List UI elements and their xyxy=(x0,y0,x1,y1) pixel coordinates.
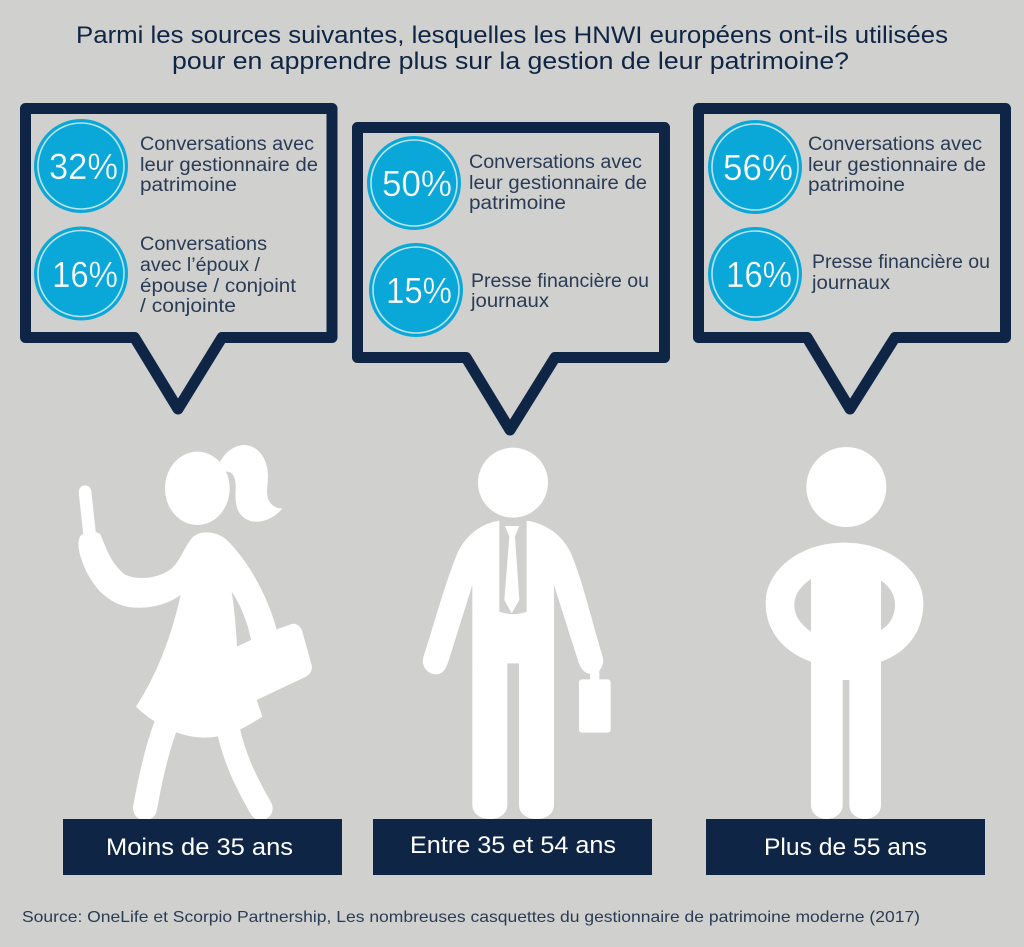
stat: 16%: 16% xyxy=(726,254,792,295)
stat: 32% xyxy=(34,119,128,213)
stat: 16%: 16% xyxy=(52,254,118,295)
text: conversations époux: Conversations xyxy=(140,234,267,255)
label: moins de 35 ans: Moins de 35 ans xyxy=(106,834,293,861)
stat: 15% xyxy=(369,243,463,337)
text: presse financière xyxy=(811,252,990,294)
stat: 50% xyxy=(367,136,461,230)
text: conversations gestionnaire xyxy=(140,134,318,196)
text: conversations gestionnaire: leur gestionnaire de xyxy=(808,155,986,176)
stat: 56%: 56% xyxy=(723,147,793,188)
text: conversations gestionnaire: leur gestionnaire de xyxy=(469,173,647,194)
stat: 50%: 50% xyxy=(382,163,452,204)
stat: 16% xyxy=(708,227,802,321)
stat: 32%: 32% xyxy=(49,146,118,187)
title: Parmi les sources suivantes, lesquelles les HNWI européens ont-ils utilisées xyxy=(76,22,948,49)
icon: man with hands on hips xyxy=(766,447,923,819)
icon: man with tie and briefcase xyxy=(423,448,611,819)
text: presse financière: Presse financière ou xyxy=(812,252,990,273)
stat: 15%: 15% xyxy=(386,270,452,311)
text: conversations gestionnaire: Conversations avec xyxy=(808,134,982,155)
panel: moins de 35 ans speech bubble xyxy=(26,108,332,409)
text: conversations gestionnaire: Conversations avec xyxy=(140,134,314,155)
title: pour en apprendre plus sur la gestion de leur patrimoine? xyxy=(172,48,849,75)
text: conversations époux xyxy=(140,234,297,317)
panel: plus de 55 ans speech bubble xyxy=(698,108,1006,409)
text: presse financière: journaux xyxy=(811,273,891,294)
text: presse financière: journaux xyxy=(470,291,550,312)
label: plus de 55 ans: Plus de 55 ans xyxy=(764,834,927,861)
stat: 16% xyxy=(34,226,128,320)
text: conversations gestionnaire: patrimoine xyxy=(808,175,905,196)
label: moins de 35 ans xyxy=(63,819,342,875)
icon: woman with phone and handbag xyxy=(78,445,312,808)
title xyxy=(76,22,948,75)
source note: Source: OneLife et Scorpio Partnership, Les nombreuses casquettes du gestionnaire de patrimoine moderne (2017) xyxy=(22,909,920,926)
label: plus de 55 ans xyxy=(706,819,985,875)
text: conversations gestionnaire: Conversations avec xyxy=(469,152,642,173)
text: presse financière xyxy=(470,271,649,312)
text: presse financière: Presse financière ou xyxy=(471,271,649,292)
label: entre 35 et 54 ans: Entre 35 et 54 ans xyxy=(410,832,616,859)
text: conversations gestionnaire: patrimoine xyxy=(140,175,237,196)
text: conversations époux: / conjointe xyxy=(140,296,236,317)
text: conversations gestionnaire: leur gestionnaire de xyxy=(140,155,318,176)
stat: 56% xyxy=(708,120,802,214)
text: conversations gestionnaire xyxy=(469,152,647,214)
panel: entre 35 et 54 ans speech bubble xyxy=(358,128,664,430)
text: conversations gestionnaire xyxy=(808,134,986,196)
text: conversations époux: épouse / conjoint xyxy=(140,276,297,297)
bubble outline 2 xyxy=(358,128,664,430)
text: conversations époux: avec l’époux / xyxy=(140,255,261,276)
label: entre 35 et 54 ans xyxy=(373,819,652,875)
bubble outline 1 xyxy=(26,108,332,409)
text: conversations gestionnaire: patrimoine xyxy=(469,193,566,214)
bubble outline 3 xyxy=(698,108,1006,409)
